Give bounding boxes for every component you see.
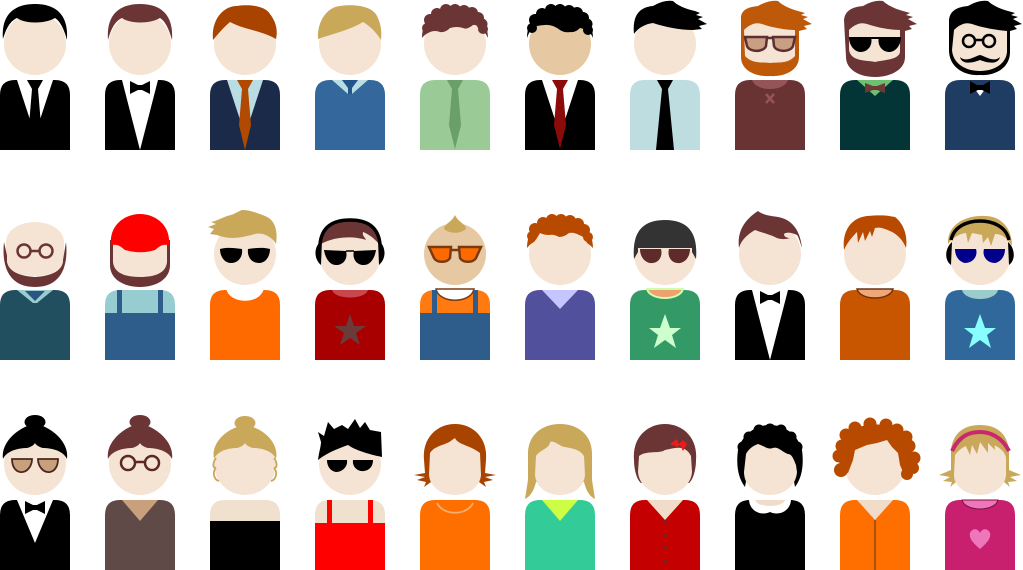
avatar: tuft of hair, orange glasses, overalls	[420, 215, 490, 360]
avatar: swept black hair, pale blue shirt	[630, 1, 707, 150]
avatar: bald bearded man, teal sweater	[0, 222, 70, 360]
avatar: black curly hair, white collar	[735, 424, 805, 570]
avatar: orange-bearded hipster	[735, 1, 812, 150]
avatar: black bun, tinted glasses, tuxedo	[0, 415, 70, 570]
row 2: casual men	[0, 210, 1015, 360]
avatar: brown hair, tuxedo	[105, 4, 175, 150]
avatar: auburn fringe, rust shirt	[840, 215, 910, 360]
avatar: brown-bearded man, sunglasses, green sweater	[840, 1, 917, 150]
avatar: curly auburn hair, purple sweater	[525, 214, 595, 360]
avatar: red cap, beard, overalls	[105, 214, 175, 360]
avatar: auburn hair, navy suit	[210, 5, 280, 150]
avatar: dark bowl cut, brown sunglasses, green star shirt	[630, 220, 700, 360]
avatar: spiky black hair, sunglasses, red dress	[315, 419, 385, 570]
avatar: black hair, black suit	[0, 4, 70, 150]
avatar: long blonde hair, teal top	[525, 424, 595, 570]
row 3: women	[0, 415, 1021, 570]
avatar: auburn flipped bob, orange top	[414, 424, 496, 570]
avatar: curly brown hair, green shirt	[420, 4, 490, 150]
avatar: swoosh hair, tuxedo	[735, 211, 805, 360]
avatar: blonde bun, strapless black dress	[210, 416, 280, 570]
avatar: curly black hair, red tie	[525, 4, 595, 150]
avatar: big curly auburn hair, orange jacket	[832, 418, 920, 570]
avatar: blonde hair, headphones, blue star shirt	[945, 216, 1015, 360]
row 1: men in shirts and suits	[0, 1, 1022, 150]
avatar: brown bob with red bow, red blouse	[630, 424, 700, 570]
avatar: blonde flip, pink hairband, magenta heart top	[939, 425, 1021, 570]
avatar: headphones, sunglasses, red shirt with star	[315, 220, 385, 360]
avatar: blond quiff, sunglasses, orange top	[208, 210, 280, 360]
avatar: moustached man, round glasses	[945, 1, 1022, 150]
avatar: blond hair, blue sweater	[315, 5, 385, 150]
avatar: brown bun, round glasses, brown sweater	[105, 415, 175, 570]
